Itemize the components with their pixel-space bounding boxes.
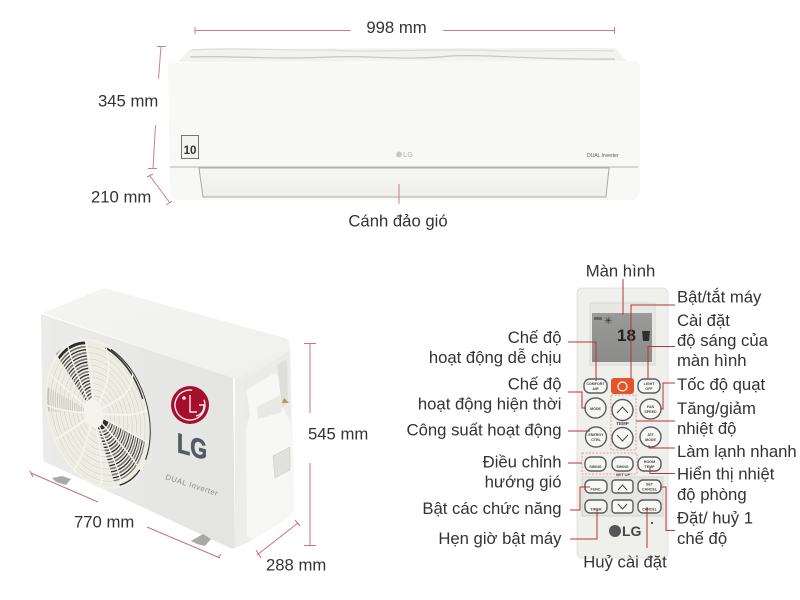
remote buttons: SWING	[616, 465, 629, 469]
label: mode: Chế độ	[508, 374, 562, 394]
label: room temperature: độ phòng	[677, 485, 747, 504]
remote buttons: SET	[646, 482, 654, 486]
indoor LG logo	[396, 152, 413, 159]
indoor dual inverter label: DUAL Inverter	[587, 153, 619, 159]
callout: air deflector	[348, 184, 448, 230]
label: room temperature: Hiển thị nhiệt	[677, 464, 775, 484]
label: comfort air: hoạt động dễ chịu	[429, 348, 562, 367]
remote dashed groups	[582, 395, 637, 474]
remote buttons: OFF	[645, 387, 653, 391]
remote buttons: LIGHT	[644, 382, 655, 386]
remote buttons: COMFORT	[586, 382, 605, 386]
inverter badge	[182, 136, 198, 158]
indoor unit body	[168, 61, 640, 200]
dimension: indoor depth	[91, 174, 172, 206]
dimension: indoor width	[195, 18, 614, 37]
remote buttons: SWING	[589, 465, 602, 469]
dimension: outdoor height	[304, 344, 368, 546]
remote buttons	[582, 379, 663, 516]
callout: air deflector: Cánh đảo gió	[348, 212, 448, 230]
label: functions: Bật các chức năng	[422, 499, 562, 518]
label: set cancel: chế độ	[677, 529, 727, 548]
label: display brightness: màn hình	[677, 351, 747, 370]
remote LG logo: LG	[622, 523, 642, 539]
label: swing	[483, 452, 562, 492]
remote buttons: FUNC.	[591, 488, 601, 492]
inverter badge: 10	[184, 145, 196, 157]
leader lines	[568, 279, 675, 548]
label: jet mode: Làm lạnh nhanh	[677, 442, 797, 461]
remote buttons: TEMP	[616, 421, 629, 426]
label: comfort air: Chế độ	[508, 328, 562, 347]
label: display brightness	[677, 311, 769, 370]
remote control	[577, 288, 668, 558]
outdoor mounting feet	[52, 476, 211, 546]
outdoor unit	[41, 288, 294, 548]
label: temperature: Tăng/giảm	[677, 399, 756, 418]
outdoor fan grille	[45, 323, 151, 505]
remote buttons: CANCEL	[642, 508, 658, 512]
indoor unit lower seam	[170, 166, 638, 168]
outdoor LG round logo	[171, 386, 209, 424]
remote buttons: TEMP	[645, 465, 655, 469]
label: room temperature	[677, 464, 775, 504]
label: cancel: Huỷ cài đặt	[583, 552, 667, 572]
label: swing: Điều chỉnh	[483, 452, 562, 472]
label: power: Bật/tắt máy	[677, 288, 762, 306]
label: screen: Màn hình	[586, 262, 655, 280]
remote buttons: TIMER	[590, 508, 602, 512]
dimension: indoor depth: 210 mm	[91, 188, 151, 206]
remote buttons: MODE	[645, 438, 656, 442]
label: energy control: Công suất hoạt động	[407, 420, 562, 440]
label: set cancel: Đặt/ huỷ 1	[677, 508, 753, 528]
remote LG logo	[609, 522, 653, 539]
remote display: ✳	[604, 316, 612, 327]
dimension: indoor height: 345 mm	[98, 92, 158, 110]
label: mode: hoạt động hiện thời	[418, 394, 562, 414]
remote buttons: ENERGY	[588, 433, 604, 437]
remote buttons: JET	[647, 433, 655, 437]
remote buttons: CTRL	[591, 438, 602, 442]
indoor unit top vent	[178, 48, 627, 62]
outdoor LG wordmark: LG	[177, 428, 207, 467]
outdoor dual inverter label: DUAL Inverter	[164, 472, 220, 498]
indoor LG logo: LG	[403, 152, 413, 159]
label: temperature	[677, 399, 756, 438]
label: set cancel	[677, 508, 753, 548]
label: display brightness: Cài đặt	[677, 311, 730, 330]
remote buttons: AIR	[592, 387, 599, 391]
dimension: indoor width: 998 mm	[366, 18, 427, 37]
remote buttons: ROOM	[644, 460, 655, 464]
label: swing: hướng gió	[485, 472, 562, 492]
label: fan speed: Tốc độ quạt	[677, 375, 765, 394]
remote buttons: SPEED	[644, 410, 657, 414]
air deflector flap	[199, 168, 609, 197]
label: mode	[418, 374, 562, 414]
remote display	[590, 303, 655, 365]
label: temperature: nhiệt độ	[677, 419, 736, 438]
label: display brightness: độ sáng của	[677, 331, 769, 350]
remote display: 18	[617, 326, 636, 345]
dimension: outdoor height: 545 mm	[308, 424, 368, 444]
dimension: indoor height	[98, 46, 166, 168]
dimension: outdoor width: 770 mm	[74, 512, 134, 532]
outdoor top face	[42, 288, 290, 379]
remote buttons: MODE	[590, 407, 601, 411]
remote buttons: FAN	[647, 405, 654, 409]
remote buttons: CANCEL	[642, 488, 658, 492]
remote power button	[611, 378, 634, 394]
dimension: outdoor width	[30, 471, 221, 558]
label: comfort air	[429, 328, 562, 367]
outdoor front face	[41, 314, 235, 548]
dimension: outdoor depth	[256, 520, 326, 574]
dimension: outdoor depth: 288 mm	[266, 556, 326, 574]
label: timer: Hẹn giờ bật máy	[438, 529, 562, 548]
remote body	[577, 288, 668, 558]
indoor unit	[168, 48, 640, 200]
outdoor side face	[235, 344, 294, 548]
remote buttons: SET UP	[616, 472, 631, 477]
